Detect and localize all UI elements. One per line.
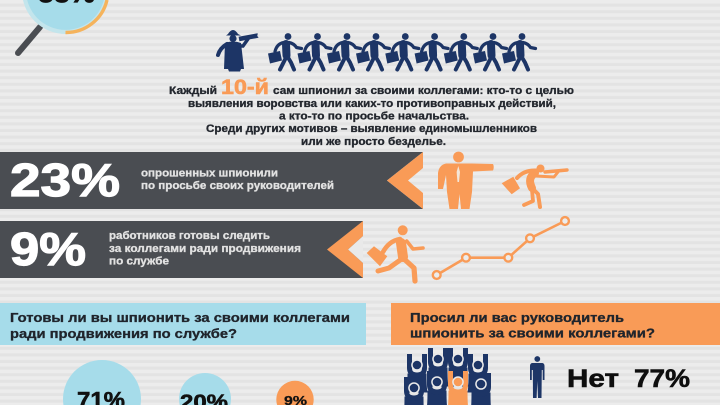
text block: every tenth employee: сам шпионил за своими коллегами: кто-то с целью	[273, 85, 574, 97]
panel: blue question heading: Готовы ли вы шпионить за своими коллегами	[10, 311, 350, 325]
text block: every tenth employee: Среди других мотивов – выявление единомышленников	[206, 123, 537, 135]
panel: blue question heading: ради продвижения по службе?	[10, 327, 237, 341]
stat: no 77%: 77%	[634, 365, 690, 393]
icon row: walking coworkers	[268, 33, 536, 70]
icon: boss pointing	[438, 152, 494, 209]
text block: every tenth employee	[169, 76, 574, 148]
icon: standing person	[530, 356, 544, 398]
icon: orange spy with telescope and case	[502, 164, 567, 207]
icon: magnifier with percentage	[18, 0, 109, 53]
panel: 9% stat bar	[0, 221, 363, 278]
panel: orange question heading: Просил ли вас руководитель	[410, 311, 624, 325]
panel: 9% stat bar: 9%	[10, 223, 86, 275]
panel: 23% stat bar: 23%	[10, 154, 120, 206]
bubble: 9%	[276, 381, 314, 405]
bubble: 20%	[179, 373, 231, 405]
panel: 9% stat bar: за коллегами ради продвижения	[109, 243, 301, 255]
stat: no 77%: Нет	[567, 365, 619, 393]
panel: orange question heading	[391, 303, 720, 345]
panel: orange question heading: шпионить за своими коллегами?	[410, 326, 655, 340]
icon: running employee with case	[367, 225, 423, 281]
text block: every tenth employee: а кто-то по просьбе начальства.	[279, 110, 469, 122]
bubble: 71%	[63, 360, 141, 405]
panel: 23% stat bar: по просьбе своих руководителей	[141, 180, 334, 192]
text block: every tenth employee: Каждый	[169, 85, 217, 97]
text block: every tenth employee: 10-й	[221, 76, 269, 99]
icon: spy with telescope	[218, 30, 260, 72]
panel: 23% stat bar: опрошенных шпионили	[141, 168, 278, 180]
chart: rising career line	[433, 217, 569, 279]
icon: crowd with one orange figure	[404, 348, 491, 405]
text block: every tenth employee: выявления воровства или каких-то противоправных действий,	[188, 98, 556, 110]
text block: every tenth employee: или же просто безделье.	[301, 136, 446, 148]
stat: no 77%	[567, 365, 690, 393]
panel: 9% stat bar: работников готовы следить	[109, 230, 270, 242]
panel: 23% stat bar	[0, 152, 423, 209]
panel: blue question heading	[0, 303, 366, 345]
panel: 9% stat bar: по службе	[109, 256, 169, 268]
